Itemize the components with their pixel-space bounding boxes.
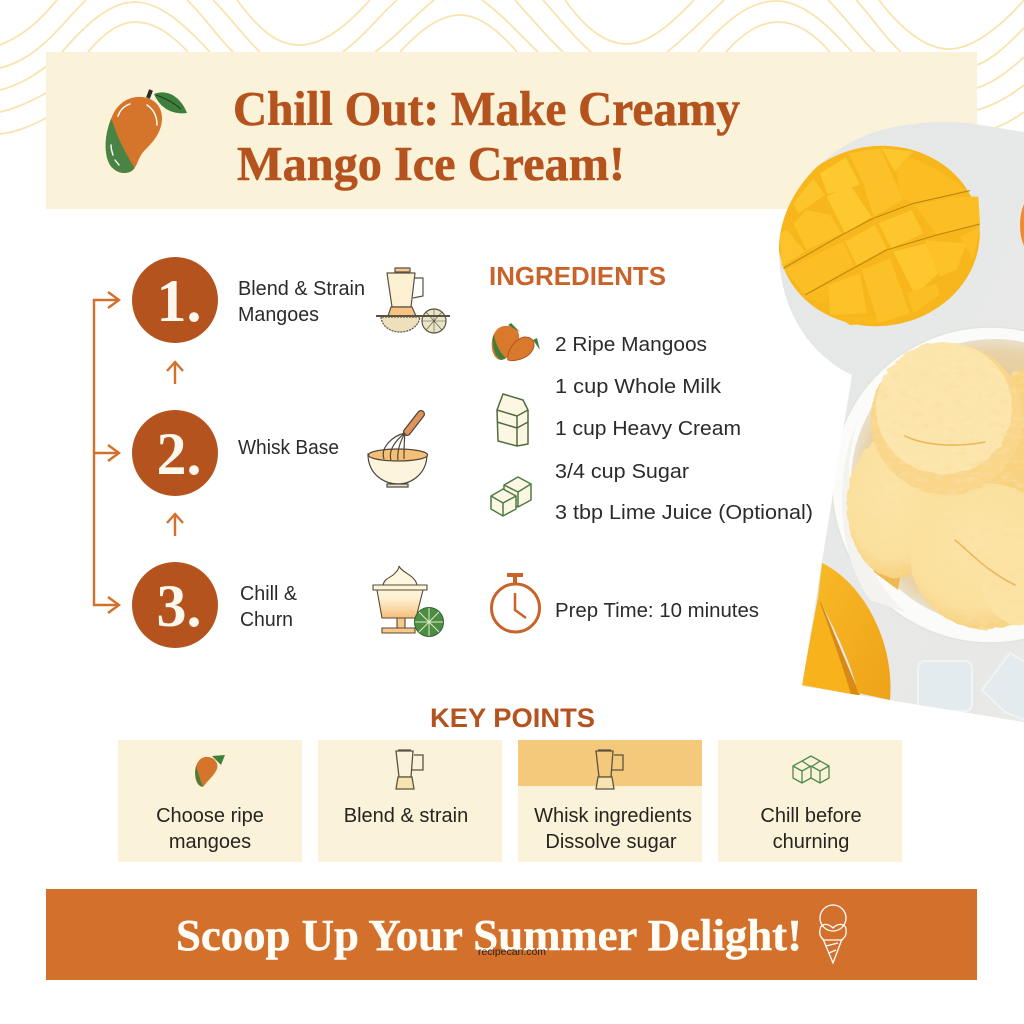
card: choose ripe mangoes: Choose ripe: [156, 805, 264, 827]
title: [233, 81, 740, 191]
header banner: [46, 52, 977, 209]
icon: sugar cubes: [491, 477, 531, 516]
ingredients heading: INGREDIENTS: [489, 261, 666, 291]
title: Chill Out: Make Creamy: [233, 81, 740, 136]
step 2: Whisk Base: [238, 437, 339, 459]
icon: milk carton: [497, 394, 528, 446]
card: chill before churning: [718, 740, 902, 862]
bowl inner left white: [842, 420, 905, 612]
ingredient list: 1 cup Whole Milk: [555, 376, 722, 398]
card: whisk ingredients: [518, 740, 702, 862]
icon: ice cream cup with lime: [373, 566, 444, 636]
footer banner: [46, 889, 977, 980]
scoop creases: [905, 436, 1015, 585]
icon: stopwatch: [492, 575, 540, 632]
mini blender icon: [396, 750, 423, 789]
ingredient list: 2 Ripe Mangoos: [555, 334, 707, 356]
icon: mango: [106, 89, 187, 173]
ingredient list: 3/4 cup Sugar: [555, 461, 689, 483]
card: chill before churning: churning: [773, 831, 849, 853]
step 1: Blend & Strain: [238, 278, 365, 300]
mini ice cubes icon: [793, 756, 829, 783]
step 3: [132, 562, 298, 648]
step 3: Churn: [240, 609, 293, 631]
step 1: [132, 257, 365, 343]
white bowl: [832, 327, 1024, 643]
key points heading: KEY POINTS: [430, 703, 595, 733]
footer banner: Scoop Up Your Summer Delight!: [176, 911, 802, 960]
steps flow arrows: [94, 292, 183, 613]
step 1: 1.: [156, 268, 202, 334]
icon: ice cream cone: [820, 905, 846, 963]
card: chill before churning: Chill before: [760, 805, 862, 827]
icon: two mangoes: [492, 323, 540, 361]
ingredient list: 1 cup Heavy Cream: [555, 418, 741, 440]
ice cream scoops: [847, 342, 1024, 629]
ingredient list: [555, 334, 813, 524]
mango half with cubes: [779, 146, 980, 326]
step 1: Mangoes: [238, 304, 319, 326]
mini blender icon: [596, 750, 623, 789]
background wave pattern: [0, 0, 1024, 134]
card: whisk ingredients: Dissolve sugar: [545, 831, 677, 853]
step 3: Chill &: [240, 583, 298, 605]
photo: mango and ice cream: [766, 110, 1024, 730]
card: choose ripe mangoes: mangoes: [169, 831, 251, 853]
ice cubes: [918, 653, 1024, 722]
mango under scoops: [873, 570, 900, 590]
card: blend and strain: [318, 740, 502, 862]
mini mango icon: [195, 755, 225, 787]
ingredient list: 3 tbp Lime Juice (Optional): [555, 502, 813, 524]
watermark: recipecan.com: [478, 946, 546, 958]
step 2: 2.: [156, 421, 202, 487]
title: Mango Ice Cream!: [237, 136, 625, 191]
orange at edge: [1020, 204, 1024, 246]
icon: whisk and bowl: [368, 414, 428, 487]
mango slices: [802, 563, 891, 700]
card: choose ripe mangoes: [118, 740, 302, 862]
card: whisk ingredients: Whisk ingredients: [534, 805, 692, 827]
card: blend and strain: Blend & strain: [344, 805, 468, 827]
bowl inner: [851, 339, 1024, 625]
step 3: 3.: [156, 573, 202, 639]
prep time: Prep Time: 10 minutes: [555, 600, 759, 622]
step 2: [132, 410, 339, 496]
icon: blender and strainer: [376, 268, 450, 333]
